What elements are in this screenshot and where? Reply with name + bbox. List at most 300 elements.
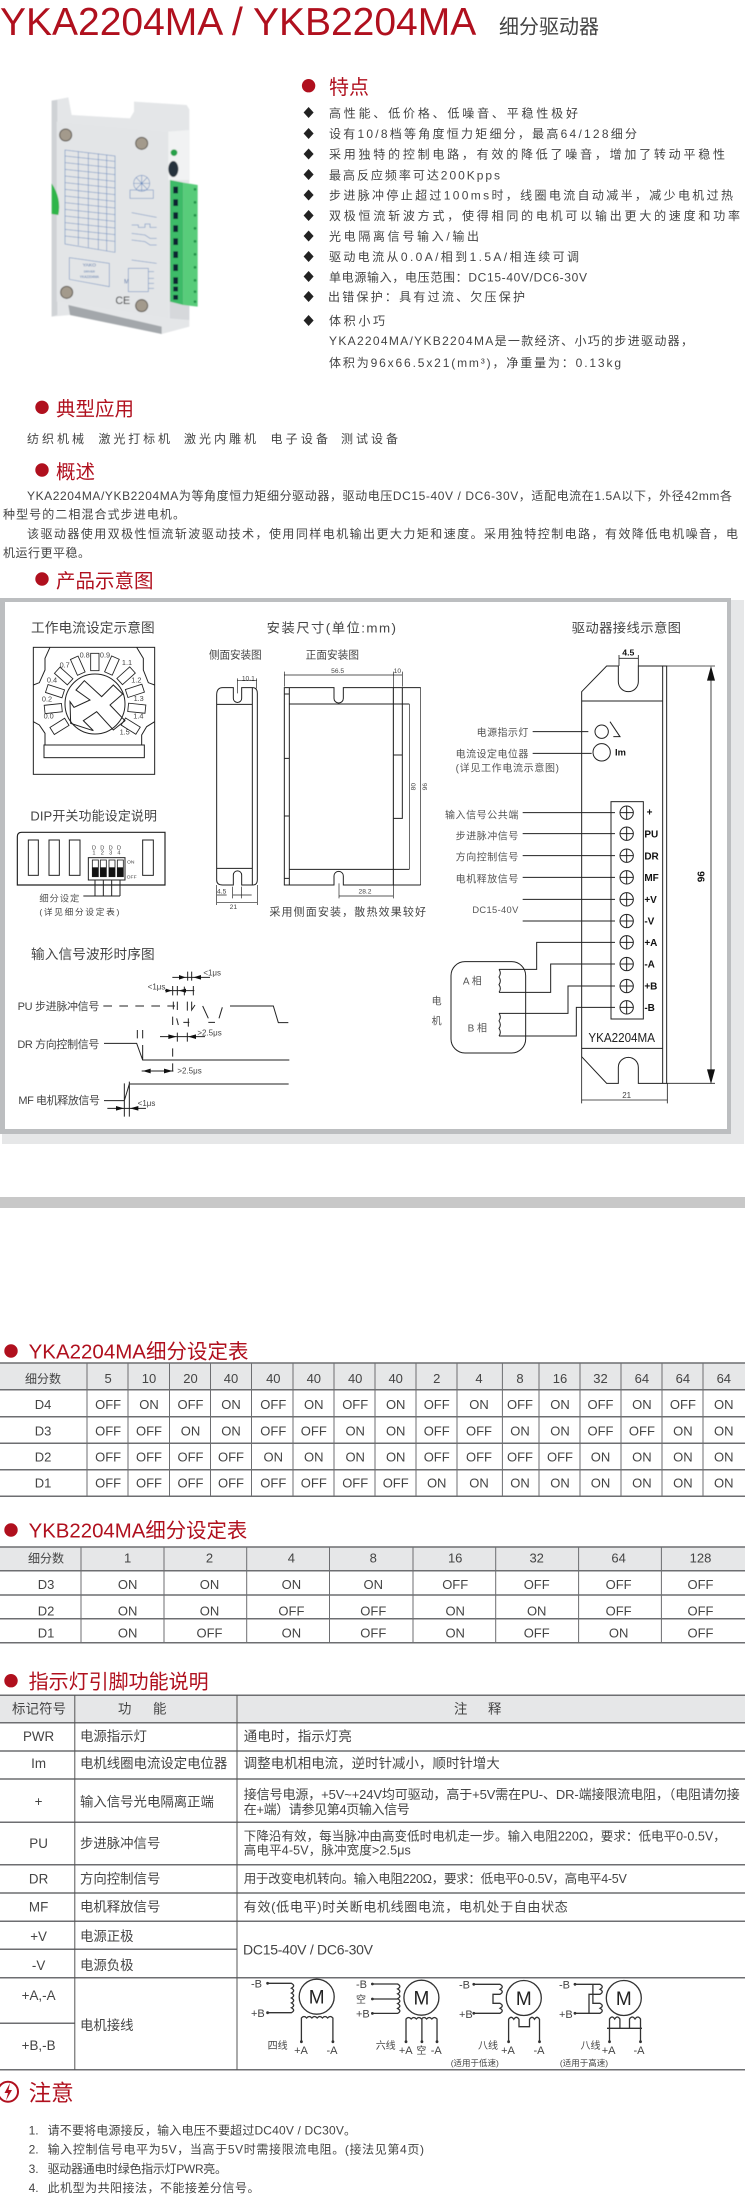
row D1: ON	[673, 1476, 693, 1490]
header row: 4	[288, 1550, 295, 1566]
row D2: OFF	[95, 1450, 121, 1464]
waveform timing diagram: 输入信号波形时序图	[31, 947, 155, 962]
row D1: D1	[38, 1626, 54, 1640]
terminal block	[611, 802, 643, 1019]
wiring diagram: DR	[644, 851, 659, 862]
heading: YKB2204MA division table: YKB2204MA细分设定表	[29, 1519, 247, 1542]
row D4: ON	[632, 1397, 652, 1412]
four-wire motor: 四线	[268, 2039, 288, 2052]
notes list: 此机型为共阳接法，不能接差分信号。	[48, 2180, 259, 2195]
header row: 128	[690, 1550, 711, 1566]
function column: 电机线圈电流设定电位器	[80, 1756, 228, 1771]
waveform timing diagram: MF 电机释放信号	[18, 1093, 100, 1107]
row D1	[35, 1476, 734, 1490]
eight-wire motor: low speed: +A	[501, 2045, 516, 2057]
heading: notes with warning icon	[0, 2081, 74, 2106]
row D3: ON	[181, 1424, 200, 1438]
wiring diagram: A 相	[463, 975, 482, 988]
LED and knob	[171, 149, 177, 156]
eight-wire motor: low speed: M	[516, 1989, 532, 2010]
heading: indicator and pin functions: 指示灯引脚功能说明	[29, 1670, 209, 1693]
feature list: 单电源输入，电压范围：DC15-40V/DC6-30V	[329, 270, 587, 284]
overview paragraph: 该驱动器使用双极性恒流斩波驱动技术，使用同样电机输出更大力矩和速度。采用独特控制电路，有效降低电机噪音，电	[27, 526, 738, 541]
green QA sticker	[52, 183, 59, 215]
dimensions	[582, 655, 715, 1103]
row D3: ON	[364, 1577, 383, 1592]
wiring diagram: 电	[432, 995, 442, 1008]
current setting dial diagram: 1.2	[131, 676, 141, 685]
notes column: 高电平4-5V，脉冲宽度>2.5μs	[244, 1842, 411, 1858]
current setting dial diagram: 1.3	[134, 694, 144, 703]
row D2: D2	[38, 1604, 54, 1618]
gray divider band	[0, 1197, 745, 1208]
eight-wire motor: low speed: 八线	[478, 2039, 498, 2052]
current setting dial diagram: 0.9	[100, 651, 110, 660]
six-wire motor: +B	[356, 2008, 370, 2020]
symbol column: MF	[29, 1900, 48, 1914]
row D2: ON	[264, 1450, 283, 1464]
heading: product diagrams: 产品示意图	[56, 570, 154, 592]
row D2: OFF	[547, 1450, 573, 1464]
table: indicator and pin functions	[0, 1695, 745, 2070]
wiring diagram: 电源指示灯	[477, 726, 528, 739]
header row: 40	[307, 1371, 321, 1386]
header row: 细分数	[25, 1371, 61, 1386]
DIP switch diagram: 1	[92, 851, 96, 857]
row D1: OFF	[301, 1476, 327, 1490]
waveform timing diagram: <1μs	[138, 1099, 155, 1108]
four-wire motor: -A	[326, 2045, 338, 2057]
applications list: 纺织机械	[27, 431, 84, 446]
feature list: 最高反应频率可达200Kpps	[329, 168, 500, 182]
motor with A and B phases	[451, 962, 526, 1053]
six-wire motor: 六线	[376, 2039, 396, 2052]
header row: 能	[153, 1702, 166, 1716]
row D4: ON	[550, 1397, 570, 1412]
four-wire motor: M	[309, 1988, 325, 2008]
row D3: ON	[386, 1424, 405, 1438]
row D1: ON	[591, 1476, 610, 1490]
eight-wire motor: high speed	[559, 1980, 645, 2068]
wiring diagram: 21	[622, 1091, 632, 1100]
six-wire motor: M	[413, 1988, 429, 2010]
mounting dimensions: side and front views: 96	[422, 783, 429, 790]
heading: typical applications: 典型应用	[56, 399, 134, 421]
header row: 2	[206, 1550, 213, 1566]
product photo: stepper driver: DRIVER	[84, 269, 96, 273]
row D2: OFF	[688, 1604, 714, 1618]
row D4: ON	[469, 1397, 489, 1412]
feature list: 驱动电流从0.0A/相到1.5A/相连续可调	[329, 249, 579, 264]
header row: 64	[611, 1550, 626, 1566]
four-wire motor	[251, 1978, 338, 2057]
wiring diagram: +A	[644, 938, 657, 949]
eight-wire motor: low speed	[451, 1980, 545, 2068]
feature list: 双极恒流斩波方式，使得相同的电机可以输出更大的速度和功率	[329, 208, 740, 223]
wiring diagram: 96	[695, 871, 706, 883]
row D4: ON	[221, 1397, 241, 1412]
row D3: OFF	[136, 1424, 162, 1438]
row D1: ON	[550, 1476, 570, 1490]
overview paragraph: 机运行更平稳。	[3, 545, 90, 560]
wiring diagram: 电流设定电位器	[456, 748, 528, 761]
eight-wire motor: low speed: +B	[459, 2009, 473, 2021]
notes column: 下降沿有效，每当脉冲由高变低时电机走一步。输入电阻220Ω，要求：低电平0-0.5V，	[244, 1828, 726, 1844]
row D2: ON	[118, 1604, 137, 1618]
function column: 输入信号光电隔离正端	[80, 1794, 214, 1810]
row D3: OFF	[260, 1424, 286, 1438]
row D1: OFF	[178, 1476, 204, 1490]
function column: 电源负极	[80, 1958, 134, 1973]
six-wire motor: +A	[399, 2045, 413, 2057]
row D2: OFF	[178, 1450, 204, 1464]
row D1: D1	[35, 1476, 51, 1490]
row D4: D4	[35, 1397, 51, 1412]
mounting dimensions: side and front views: 侧面安装图	[209, 649, 262, 662]
notes column: 有效(低电平)时关断电机线圈电流，电机处于自由状态	[244, 1900, 568, 1914]
row D1: ON	[632, 1476, 652, 1490]
wiring diagram: +B	[644, 981, 657, 992]
header row: 40	[388, 1371, 403, 1386]
heading: features	[302, 76, 369, 99]
header row: 20	[183, 1371, 198, 1386]
wiring diagram: PU	[644, 829, 658, 840]
eight-wire motor: high speed: 八线	[580, 2039, 600, 2052]
row D3: D3	[35, 1424, 51, 1438]
DIP switch diagram: D	[109, 846, 113, 852]
wiring diagram: -B	[644, 1003, 655, 1014]
row D1: ON	[714, 1476, 734, 1490]
product photo: stepper driver: CE	[115, 295, 130, 307]
notes list: 1.	[29, 2124, 39, 2138]
wiring diagram: +V	[644, 895, 657, 906]
notes list: 请不要将电源接反，输入电压不要超过DC40V / DC30V。	[48, 2122, 356, 2138]
row D4: ON	[386, 1397, 405, 1412]
row D2: ON	[591, 1450, 610, 1464]
mounting dimensions: side and front views	[209, 621, 429, 919]
six-wire motor: -B	[356, 1979, 367, 1991]
title: YKA2204MA / YKB2204MA	[0, 1, 476, 44]
four-wire motor: +B	[251, 2008, 265, 2020]
front view	[284, 688, 393, 885]
feature list: 步进脉冲停止超过100ms时，线圈电流自动减半，减少电机过热	[329, 188, 733, 202]
eight-wire motor: high speed: +B	[559, 2009, 573, 2021]
header row: 64	[635, 1371, 649, 1386]
DIP switch diagram: D	[100, 846, 104, 852]
LED and potentiometer	[595, 725, 608, 738]
row D2: OFF	[278, 1604, 304, 1618]
row D4: ON	[714, 1397, 734, 1412]
mounting dimensions: side and front views: 21	[230, 904, 237, 911]
DIP switch diagram: 3	[109, 851, 112, 857]
overview paragraph	[3, 488, 738, 560]
function column	[80, 1729, 228, 2033]
heading: overview	[35, 461, 95, 483]
row D1: OFF	[196, 1626, 223, 1640]
title: 细分驱动器	[499, 16, 599, 38]
row D1: ON	[282, 1626, 301, 1640]
heading: notes with warning icon: 注意	[29, 2081, 74, 2106]
function column: 电机接线	[80, 2017, 134, 2033]
eight-wire motor: high speed: (适用于高速)	[560, 2058, 608, 2068]
DIP switch diagram: ON	[127, 859, 135, 865]
row D3: OFF	[524, 1577, 550, 1592]
eight-wire motor: low speed: -B	[459, 1980, 470, 1992]
six-wire motor: 空	[356, 1993, 366, 2006]
feature list: 采用独特的控制电路，有效的降低了噪音，增加了转动平稳性	[329, 146, 725, 162]
wiring diagram: 4.5	[622, 648, 635, 658]
feature list: YKA2204MA/YKB2204MA是一款经济、小巧的步进驱动器，	[329, 333, 693, 348]
row D3: OFF	[629, 1424, 655, 1438]
symbol column: +B,-B	[22, 2038, 56, 2053]
product photo: stepper driver: YAKO	[83, 263, 96, 269]
heading: YKA2204MA division table: YKA2204MA细分设定表	[29, 1340, 248, 1363]
table: YKB2204MA division settings	[0, 1547, 745, 1643]
header row: 标记符号	[12, 1702, 66, 1716]
heading: features: 特点	[329, 76, 369, 99]
row D1: OFF	[95, 1476, 121, 1490]
row D3: ON	[550, 1424, 570, 1438]
symbol column: PWR	[23, 1729, 55, 1744]
eight-wire motor: low speed: -A	[534, 2045, 545, 2057]
product photo: stepper driver: M	[124, 279, 129, 285]
waveform timing diagram: <1μs	[148, 982, 165, 991]
header row: 64	[676, 1371, 690, 1386]
symbol column: +A,-A	[22, 1988, 56, 2003]
row D2	[38, 1604, 714, 1618]
wiring diagram: MF	[644, 873, 659, 884]
notes column: 通电时，指示灯亮	[244, 1728, 352, 1744]
symbol column: PU	[29, 1836, 48, 1851]
wiring diagram: (详见工作电流示意图)	[456, 761, 559, 774]
driver outline	[582, 666, 667, 1083]
eight-wire motor: low speed: (适用于低速)	[451, 2058, 499, 2068]
header row: 1	[124, 1550, 131, 1566]
row D2: ON	[714, 1450, 734, 1464]
eight-wire motor: high speed: M	[616, 1989, 632, 2010]
symbol column: Im	[31, 1756, 46, 1771]
current setting dial diagram: 工作电流设定示意图	[31, 620, 155, 636]
symbol column: -V	[32, 1958, 45, 1973]
current setting dial diagram: 1.1	[122, 658, 132, 667]
row D1: OFF	[260, 1476, 286, 1490]
row D4: OFF	[424, 1397, 450, 1412]
row D2: ON	[673, 1450, 693, 1464]
current setting dial diagram: 0.7	[60, 661, 70, 670]
notes column: 用于改变电机转向。输入电阻220Ω，要求：低电平0-0.5V，高电平4-5V	[244, 1871, 627, 1886]
row D1: ON	[445, 1626, 465, 1640]
header row: 注	[454, 1702, 467, 1716]
notes list: 3.	[29, 2162, 39, 2176]
header row: 细分数	[28, 1550, 64, 1566]
row D1: ON	[510, 1476, 530, 1490]
wiring diagram: 输入信号公共端	[445, 809, 518, 822]
mounting dimensions: side and front views: 80	[411, 783, 418, 790]
row D2: OFF	[507, 1450, 533, 1464]
row D4: OFF	[588, 1397, 614, 1412]
overview paragraph: 种型号的二相混合式步进电机。	[3, 506, 185, 522]
header row: 32	[593, 1371, 608, 1386]
green terminal block	[170, 180, 183, 305]
header row: 32	[529, 1550, 544, 1566]
row D4	[35, 1397, 734, 1412]
DIP switch diagram	[17, 808, 165, 917]
row D3: ON	[510, 1424, 530, 1438]
row D2: OFF	[424, 1450, 450, 1464]
row D3: OFF	[688, 1577, 714, 1592]
DIP switch diagram: 细分设定	[39, 892, 79, 903]
row D4: OFF	[260, 1397, 286, 1412]
row D2	[35, 1450, 734, 1464]
header row: 4	[475, 1371, 483, 1386]
row D2: ON	[386, 1450, 405, 1464]
wiring diagram	[432, 620, 715, 1103]
applications list: 激光内雕机	[184, 431, 256, 446]
header row	[28, 1550, 711, 1566]
row D3	[35, 1424, 734, 1438]
row D4: OFF	[342, 1397, 368, 1412]
wiring diagram: -A	[644, 960, 655, 971]
wiring diagram: 机	[432, 1015, 442, 1028]
notes column: 在+端）请参见第4页输入信号	[244, 1802, 410, 1817]
blue division table on the driver	[65, 150, 157, 292]
feature list: 高性能、低价格、低噪音、平稳性极好	[329, 106, 578, 120]
row D1: ON	[609, 1626, 628, 1640]
row D3: OFF	[466, 1424, 492, 1438]
DIP switch diagram: OFF	[127, 875, 137, 881]
current setting dial diagram: 0.4	[47, 676, 57, 685]
notes list	[29, 2122, 424, 2195]
row D2: D2	[35, 1450, 51, 1464]
row D3: ON	[118, 1577, 137, 1592]
function column: 方向控制信号	[80, 1872, 160, 1886]
notes list: 2.	[29, 2142, 39, 2156]
waveform timing diagram: <1μs	[203, 969, 221, 978]
row D1: OFF	[688, 1626, 714, 1640]
current setting dial diagram: 1.5	[120, 727, 130, 736]
waveform timing diagram: >2.5μs	[177, 1066, 202, 1075]
header row: 16	[553, 1371, 567, 1386]
product photo: stepper driver: YKA2204MA	[80, 275, 100, 279]
header row: 8	[516, 1371, 524, 1386]
row D3: ON	[714, 1424, 734, 1438]
feature list: 出错保护：具有过流、欠压保护	[328, 289, 525, 304]
wiring diagram: Im	[615, 748, 626, 758]
wiring diagram: 方向控制信号	[456, 850, 518, 863]
row D2: ON	[200, 1604, 219, 1618]
row D1: OFF	[383, 1476, 409, 1490]
row D4: ON	[304, 1397, 324, 1412]
header row: 8	[370, 1550, 377, 1566]
current setting dial diagram: 0.8	[80, 651, 90, 660]
mounting dimensions: side and front views: 10.1	[242, 675, 255, 682]
DIP switch diagram: 4	[117, 851, 121, 857]
header row: 10	[142, 1371, 156, 1386]
row D3: D3	[38, 1577, 54, 1592]
waveform timing diagram	[17, 947, 289, 1117]
heading: overview: 概述	[56, 461, 95, 483]
header row	[12, 1702, 502, 1716]
row D2: OFF	[136, 1450, 162, 1464]
symbol column: +V	[30, 1929, 47, 1944]
header row: 功	[118, 1702, 131, 1716]
current setting dial diagram	[31, 620, 155, 774]
current setting dial diagram: 0.2	[42, 695, 52, 704]
waveform timing diagram: >2.5μs	[197, 1028, 222, 1037]
four-wire motor: +A	[294, 2045, 309, 2057]
row D3: OFF	[442, 1577, 468, 1592]
eight-wire motor: high speed: -B	[559, 1980, 570, 1992]
wiring diagram: 步进脉冲信号	[456, 830, 518, 843]
mounting dimensions: side and front views: 4.5	[217, 888, 227, 895]
mounting dimensions: side and front views: 10	[394, 668, 401, 675]
notes list: 输入控制信号电平为5V，当高于5V时需接限流电阻。(接法见第4页)	[48, 2142, 424, 2156]
table: YKA2204MA division settings	[0, 1363, 745, 1496]
DIP switch diagram: DIP开关功能设定说明	[30, 808, 157, 823]
header row: 5	[104, 1371, 112, 1386]
header row: 40	[224, 1371, 238, 1386]
row D4: OFF	[507, 1397, 533, 1412]
row D2: ON	[345, 1450, 365, 1464]
header row: 40	[266, 1371, 281, 1386]
row D1: OFF	[360, 1626, 386, 1640]
mounting dimensions: side and front views: 采用侧面安装，散热效果较好	[269, 905, 426, 919]
function column: 电源正极	[80, 1929, 134, 1944]
wiring diagram: DC15-40V	[472, 905, 519, 915]
motor wiring diagrams	[251, 1978, 645, 2068]
function column: 电源指示灯	[80, 1729, 147, 1744]
header row: 40	[348, 1371, 362, 1386]
row D3: ON	[221, 1424, 241, 1438]
applications list: 电子设备	[270, 432, 328, 446]
row D1: OFF	[524, 1626, 550, 1640]
header row	[25, 1371, 731, 1386]
row D3: OFF	[301, 1424, 327, 1438]
header row: 16	[448, 1550, 462, 1566]
row D3: OFF	[588, 1424, 614, 1438]
symbol column: DR	[29, 1872, 49, 1886]
row D2: ON	[527, 1604, 546, 1618]
row D2: ON	[632, 1450, 652, 1464]
row D1: ON	[427, 1476, 446, 1490]
waveform timing diagram: PU 步进脉冲信号	[18, 999, 99, 1013]
row D3: OFF	[424, 1424, 450, 1438]
DIP switch diagram: (详见细分设定表)	[39, 906, 119, 917]
current setting dial diagram: 1.4	[133, 712, 143, 721]
DIP switch diagram: D	[117, 846, 121, 852]
row D2: OFF	[466, 1450, 492, 1464]
notes column	[243, 1728, 740, 1958]
row D1	[38, 1626, 714, 1640]
six-wire motor: 空	[416, 2044, 426, 2057]
wiring diagram: +	[647, 807, 653, 818]
row D3: ON	[282, 1577, 301, 1592]
mounting dimensions: side and front views: 56.5	[331, 668, 344, 675]
header row: 64	[717, 1371, 731, 1386]
notes column: 接信号电源，+5V~+24V均可驱动，高于+5V需在PU-、DR-端接限流电阻，（电阻请勿接	[244, 1787, 740, 1802]
row D4: OFF	[670, 1397, 696, 1412]
feature list: 体积为96x66.5x21(mm³)，净重量为：0.13kg	[329, 356, 621, 370]
row D2: ON	[445, 1604, 465, 1618]
four-wire motor: -B	[251, 1978, 262, 1990]
notes column: DC15-40V / DC6-30V	[243, 1942, 374, 1958]
function column: 电机释放信号	[80, 1900, 160, 1914]
symbol column: +	[35, 1794, 43, 1809]
wiring diagram: 驱动器接线示意图	[572, 620, 681, 636]
feature list: 设有10/8档等角度恒力矩细分，最高64/128细分	[329, 126, 637, 141]
applications list	[27, 431, 398, 446]
side view	[217, 688, 257, 885]
